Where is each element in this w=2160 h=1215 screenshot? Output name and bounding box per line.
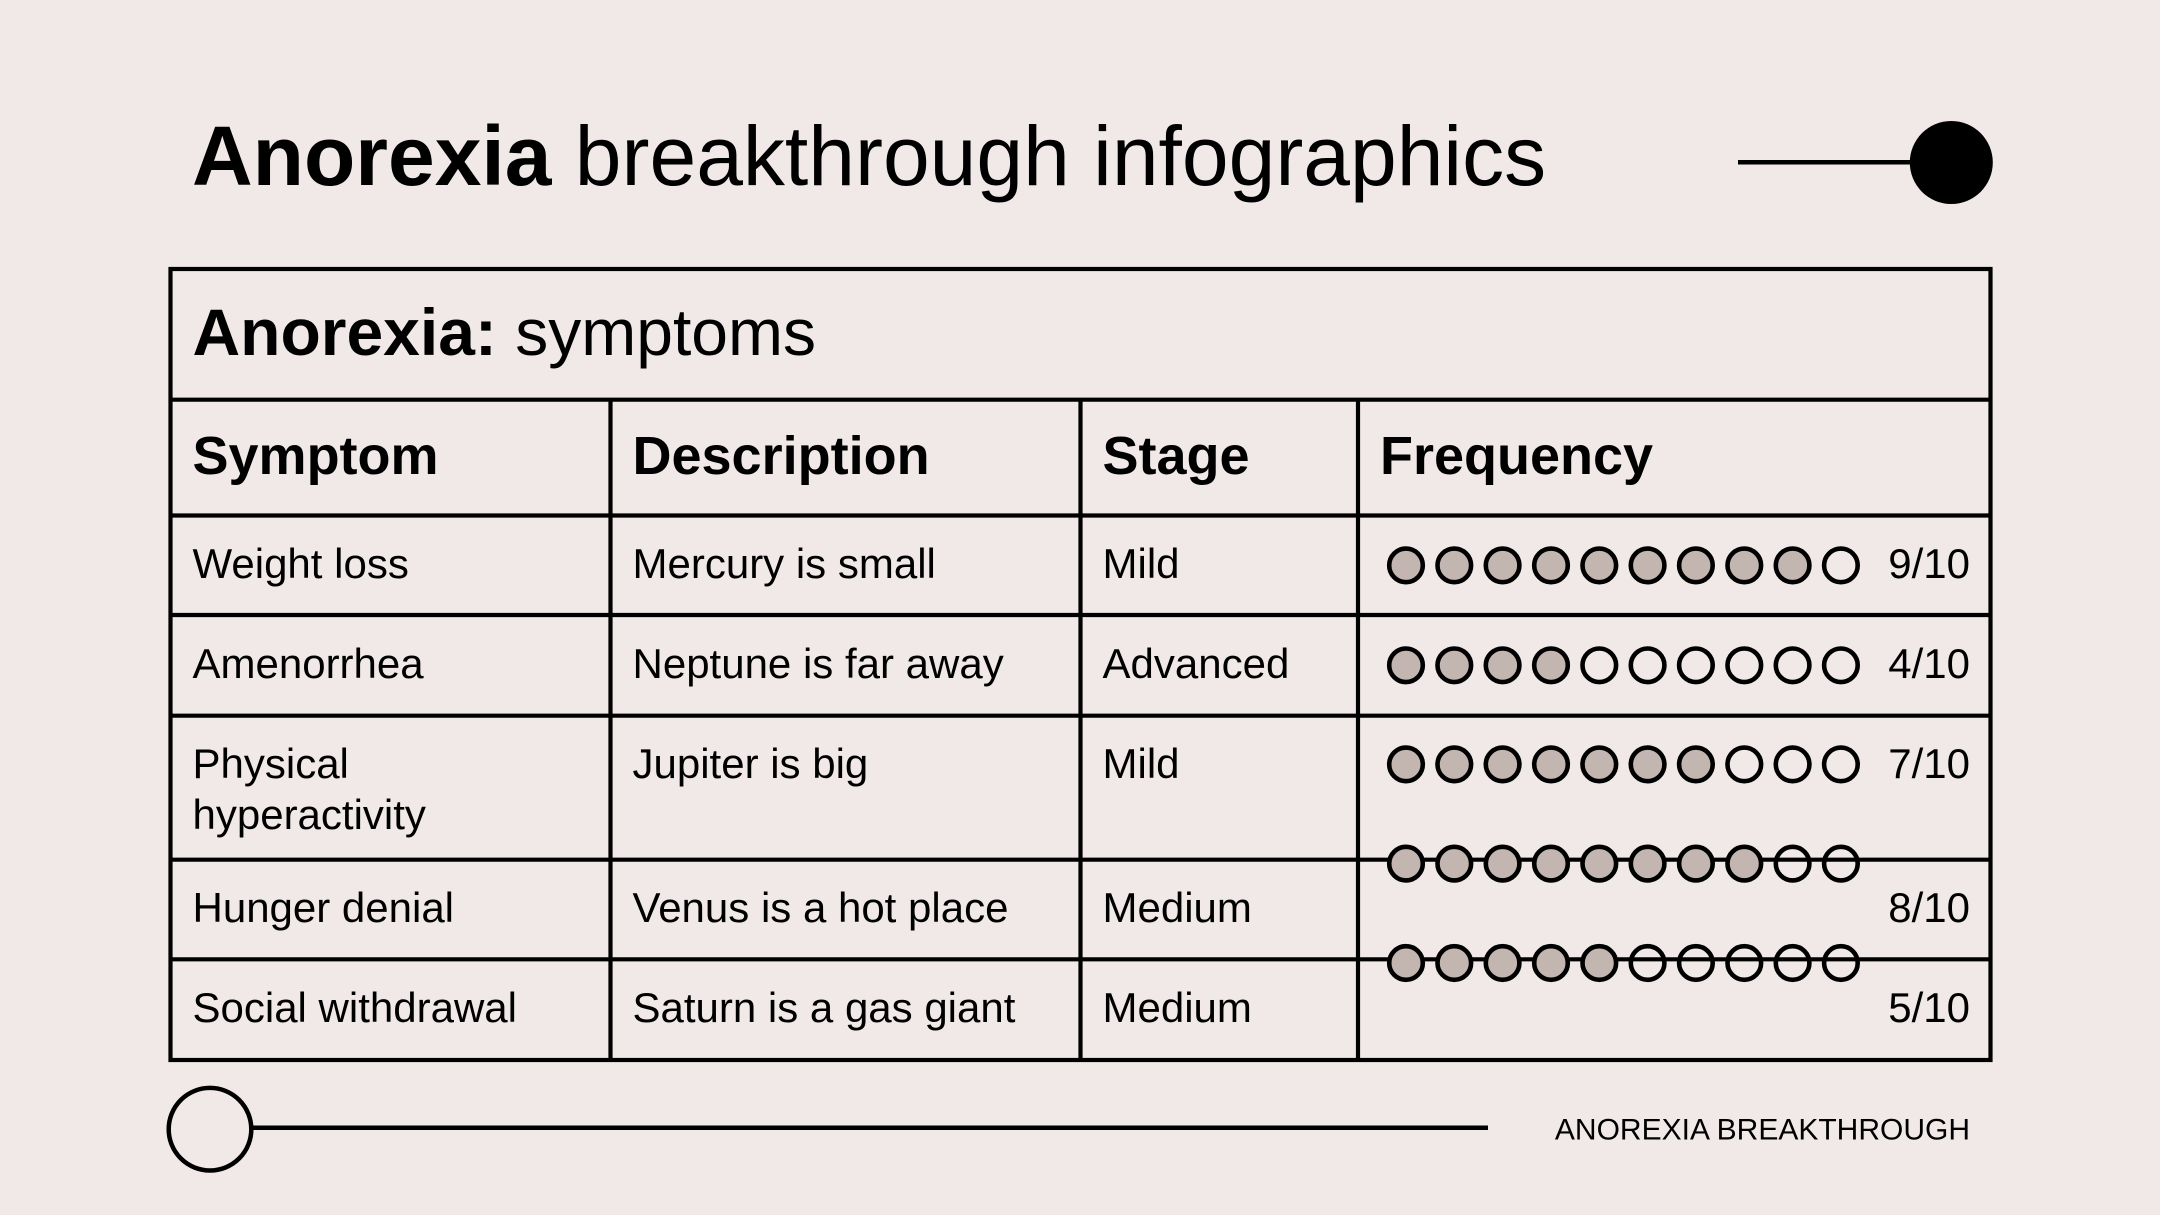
column headers: Stage xyxy=(1102,426,1250,486)
row: weight loss: Mild xyxy=(1102,540,1180,587)
row: social withdrawal: Medium xyxy=(1102,984,1252,1031)
row: physical hyperactivity: hyperactivity xyxy=(192,791,426,838)
row: amenorrhea: Advanced xyxy=(1102,640,1289,687)
row: social withdrawal xyxy=(192,946,1970,1031)
table grid xyxy=(170,269,1990,1060)
icon: line with solid circle xyxy=(1738,121,1993,204)
row: amenorrhea: 4/10 xyxy=(1888,640,1970,687)
title: Anorexia breakthrough infographics xyxy=(192,109,1546,203)
column headers: Frequency xyxy=(1380,426,1653,486)
row: physical hyperactivity: Physical xyxy=(192,740,349,787)
dots: 9 of 10 xyxy=(1389,549,1858,582)
row: amenorrhea xyxy=(192,640,1970,687)
column headers: Symptom xyxy=(192,426,439,486)
row: weight loss xyxy=(192,540,1970,587)
row: hunger denial: Medium xyxy=(1102,884,1252,931)
row: hunger denial xyxy=(192,847,1970,931)
row: hunger denial: Venus is a hot place xyxy=(632,884,1008,931)
row: physical hyperactivity xyxy=(192,740,1970,838)
row: amenorrhea: Amenorrhea xyxy=(192,640,424,687)
row: amenorrhea: Neptune is far away xyxy=(632,640,1004,687)
footer label: ANOREXIA BREAKTHROUGH xyxy=(1555,1114,1970,1146)
row: social withdrawal: Saturn is a gas giant xyxy=(632,984,1016,1031)
dots: 8 of 10 xyxy=(1389,847,1858,880)
dots: 7 of 10 xyxy=(1389,748,1858,781)
row: hunger denial: Hunger denial xyxy=(192,884,454,931)
row: physical hyperactivity: 7/10 xyxy=(1888,740,1970,787)
row: weight loss: 9/10 xyxy=(1888,540,1970,587)
row: weight loss: Mercury is small xyxy=(632,540,936,587)
row: weight loss: Weight loss xyxy=(192,540,409,587)
table heading: Anorexia: symptoms xyxy=(192,295,816,369)
row: social withdrawal: 5/10 xyxy=(1888,984,1970,1031)
table: symptoms xyxy=(170,269,1990,1060)
row: hunger denial: 8/10 xyxy=(1888,884,1970,931)
row: social withdrawal: Social withdrawal xyxy=(192,984,517,1031)
dots: 5 of 10 xyxy=(1389,946,1858,980)
icon: hollow circle with line xyxy=(169,1088,1488,1170)
dots: 4 of 10 xyxy=(1389,648,1858,682)
row: physical hyperactivity: Jupiter is big xyxy=(632,740,868,787)
column headers: Description xyxy=(632,426,930,486)
row: physical hyperactivity: Mild xyxy=(1102,740,1180,787)
column headers xyxy=(192,426,1653,486)
